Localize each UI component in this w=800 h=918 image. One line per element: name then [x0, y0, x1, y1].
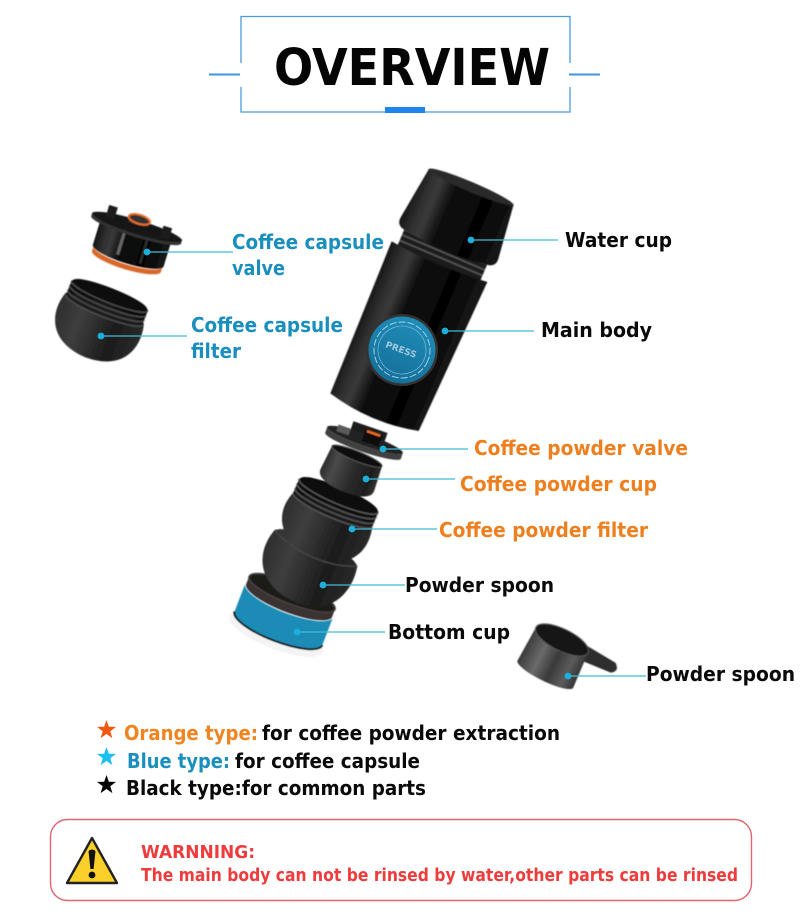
product: exploded lower parts: [224, 414, 407, 666]
label: main body: Main body: [541, 318, 652, 342]
label: water cup: Water cup: [565, 228, 672, 252]
part: separate powder spoon: [514, 617, 623, 708]
callout leaders: [98, 237, 646, 679]
part: coffee powder cup: [316, 441, 386, 502]
label: coffee capsule filter: [191, 313, 343, 363]
icon: orange star: [97, 720, 116, 738]
label: coffee powder valve: Coffee powder valve: [474, 436, 688, 460]
label: coffee capsule valve: Coffee capsule: [232, 230, 384, 254]
label: coffee capsule valve: valve: [232, 256, 285, 280]
part: coffee capsule valve: [79, 201, 186, 283]
label: coffee capsule filter: Coffee capsule: [191, 313, 343, 337]
part: water cup: [395, 166, 520, 271]
legend: black type: Black type:for common parts: [126, 776, 426, 800]
legend: blue type: Blue type:: [127, 749, 230, 773]
product: main body and water cup: [324, 162, 522, 439]
warning panel: [50, 820, 752, 900]
part: press button: [355, 303, 449, 397]
icon: black star: [97, 775, 116, 793]
label: coffee capsule filter: filter: [191, 339, 241, 363]
legend: [97, 720, 560, 800]
part: powder spoon: [250, 521, 363, 619]
part: press button: PRESS: [384, 340, 418, 361]
part: water cup lid: [427, 164, 515, 210]
part: neck: [391, 224, 490, 296]
icon: warning triangle: [67, 838, 117, 883]
part: bottom cup: [224, 565, 343, 666]
label: coffee powder filter: Coffee powder filter: [439, 518, 648, 542]
label: bottom cup: Bottom cup: [388, 620, 510, 644]
heading: OVERVIEW with frame: OVERVIEW: [274, 39, 550, 98]
part: coffee powder filter: [271, 470, 384, 574]
label: coffee powder cup: Coffee powder cup: [460, 472, 657, 496]
legend: blue description: for coffee capsule: [235, 749, 420, 773]
warning heading: WARNNING:: [141, 842, 255, 863]
label: powder spoon: Powder spoon: [405, 573, 554, 597]
legend: orange description: for coffee powder extraction: [262, 721, 560, 745]
icon: blue star: [97, 747, 116, 765]
part: main body: [325, 241, 487, 438]
legend: orange type: Orange type:: [124, 721, 258, 745]
heading: OVERVIEW with frame: [209, 16, 600, 113]
part: coffee powder valve: [323, 414, 407, 464]
part: coffee capsule filter: [44, 272, 154, 374]
label: coffee capsule valve: [232, 230, 384, 280]
